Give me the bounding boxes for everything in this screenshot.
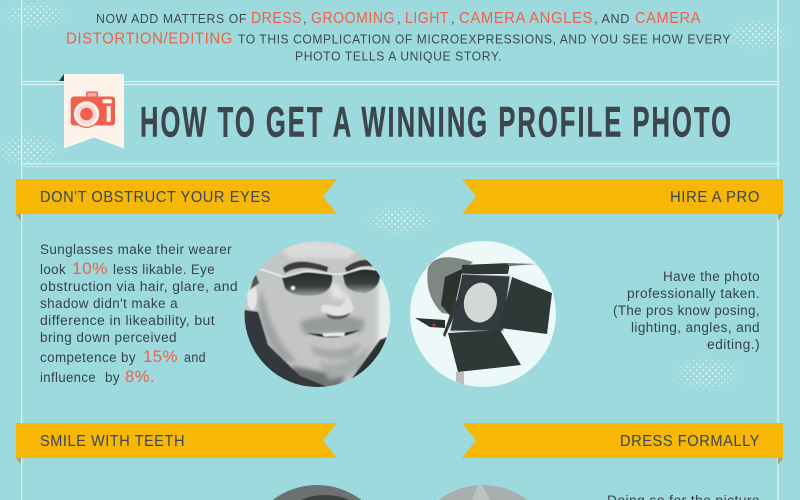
text block: hire a pro: editing.) bbox=[707, 337, 760, 352]
intro text block: DRESS bbox=[251, 10, 302, 27]
photo: formal dress (cropped) bbox=[438, 485, 527, 500]
banner: hire a pro bbox=[462, 179, 783, 221]
intro text block: , AND bbox=[594, 12, 630, 26]
text block: sunglasses: 10% bbox=[72, 259, 108, 278]
text block: sunglasses: shadow didn't make a bbox=[40, 296, 178, 311]
banner: don't obstruct your eyes: DON'T OBSTRUCT YOUR EYES bbox=[40, 189, 271, 206]
text block: sunglasses: look bbox=[40, 262, 66, 277]
text block: sunglasses: 8%. bbox=[125, 367, 155, 386]
text block: sunglasses: by bbox=[105, 370, 120, 385]
intro text block: PHOTO TELLS A UNIQUE STORY. bbox=[295, 50, 502, 64]
intro text block: LIGHT bbox=[405, 10, 449, 27]
intro text block bbox=[66, 10, 731, 64]
text block: sunglasses bbox=[40, 242, 238, 386]
text block: sunglasses: less likable. Eye bbox=[113, 262, 215, 277]
text block: hire a pro: Have the photo bbox=[663, 269, 760, 284]
intro text block: GROOMING bbox=[311, 10, 395, 27]
text block: sunglasses: obstruction via hair, glare, and bbox=[40, 279, 238, 294]
text block: sunglasses: Sunglasses make their wearer bbox=[40, 242, 232, 257]
text block: hire a pro bbox=[613, 269, 760, 352]
text block: sunglasses: 15% bbox=[143, 347, 178, 366]
text block: sunglasses: and bbox=[184, 350, 206, 365]
intro text block: CAMERA bbox=[635, 10, 701, 27]
banner: dress formally bbox=[462, 423, 783, 465]
photo: man in sunglasses bbox=[244, 241, 392, 392]
text block: hire a pro: (The pros know posing, bbox=[613, 303, 760, 318]
intro text block: CAMERA ANGLES bbox=[459, 10, 593, 27]
intro text block: , bbox=[451, 12, 455, 26]
text block: sunglasses: difference in likeability, but bbox=[40, 313, 215, 328]
banner: smile with teeth: SMILE WITH TEETH bbox=[40, 433, 185, 450]
photo: smiling portrait (cropped) bbox=[272, 485, 362, 500]
text block: sunglasses: competence by bbox=[40, 350, 136, 365]
text block: sunglasses: bring down perceived bbox=[40, 330, 177, 345]
photo: studio light bbox=[410, 241, 557, 390]
text block: hire a pro: lighting, angles, and bbox=[631, 320, 760, 335]
banner: smile with teeth bbox=[16, 423, 337, 465]
intro text block: , bbox=[303, 12, 307, 26]
intro text block: , bbox=[397, 12, 401, 26]
intro text block: TO THIS COMPLICATION OF MICROEXPRESSIONS, AND YOU SEE HOW EVERY bbox=[238, 32, 731, 46]
text block: sunglasses: influence bbox=[40, 370, 96, 385]
banner: hire a pro: HIRE A PRO bbox=[670, 189, 760, 206]
text block: hire a pro: professionally taken. bbox=[627, 286, 760, 301]
banner: don't obstruct your eyes bbox=[16, 179, 337, 221]
ribbon with camera icon bbox=[59, 74, 124, 148]
icon: camera bbox=[71, 92, 115, 128]
banner: dress formally: DRESS FORMALLY bbox=[620, 433, 760, 450]
intro text block: NOW ADD MATTERS OF bbox=[96, 12, 247, 26]
intro text block: DISTORTION/EDITING bbox=[66, 30, 233, 48]
